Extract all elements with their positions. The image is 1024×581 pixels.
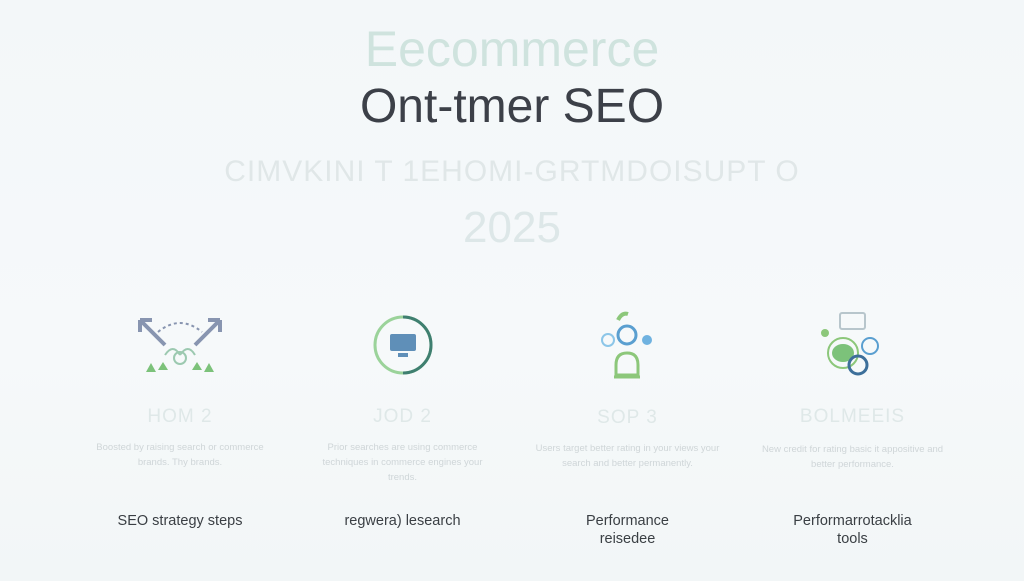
card 4 <box>762 312 943 547</box>
icon: bubbles <box>821 312 879 376</box>
description: New credit for rating basic it appositive and better performance. <box>762 444 943 470</box>
label <box>586 513 669 547</box>
heading: SOP 3 <box>597 407 658 428</box>
card 1 <box>96 318 264 529</box>
label: regwerа) lesearch <box>344 513 461 529</box>
year: 2025 <box>463 203 561 252</box>
description: Prior searches are using commerce techniques in commerce engines your trends. <box>322 442 482 483</box>
heading: HOM 2 <box>147 406 213 427</box>
heading: BOLMEEIS <box>800 406 905 427</box>
label: Performance <box>586 513 669 529</box>
label: Performarrotacklia <box>793 513 912 529</box>
icon: ring with monitor <box>374 316 432 374</box>
icon: person with gears <box>601 312 652 378</box>
label: tools <box>837 531 868 547</box>
card 2 <box>322 316 482 529</box>
label: SEO strategy steps <box>118 513 242 529</box>
heading: JOD 2 <box>373 406 432 427</box>
subtitle: CIMVKINI T 1EHOMI-GRTMDOISUPT O <box>224 155 800 188</box>
title line 1: Eecommerce <box>365 21 659 77</box>
card 3 <box>536 312 720 547</box>
label: reisedee <box>600 531 655 547</box>
description: Users target better rating in your views your search and better permanently. <box>536 443 719 469</box>
title line 2: Ont-tmer SEO <box>360 80 664 133</box>
label <box>793 513 912 547</box>
icon: arrows and trees <box>138 318 222 372</box>
description: Boosted by raising search or commerce brands. Thy brands. <box>96 442 264 468</box>
